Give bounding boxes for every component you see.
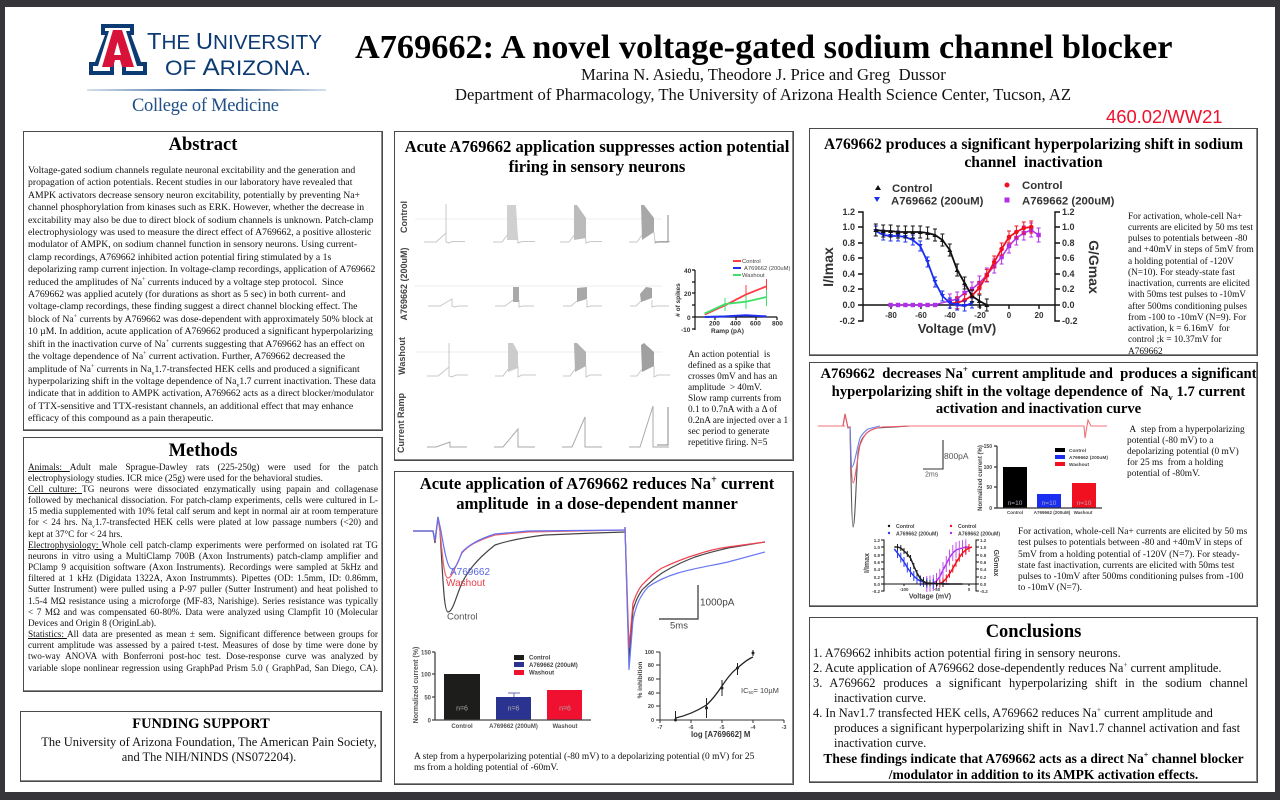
abstract text: hyperpolarizing shift in the voltage dependence of Nav1.7 current inactivation. These data (28, 376, 376, 389)
chart: Nav1.7 activation and inactivation curves: I/Imax (864, 553, 871, 573)
funding text: and The NIH/NINDS (NS072204). (122, 750, 296, 764)
methods text: kept at 37°C for < 24 hrs. (28, 530, 122, 540)
caption: action potential definition (688, 350, 788, 448)
caption: inactivation protocol: and +40mV in steps of 5mV from (1128, 245, 1254, 255)
heading: dose-dependent reduction: amplitude in a dose-dependent manner (456, 494, 738, 513)
chart: Nav1.7 activation and inactivation curves: 1.0 (980, 545, 987, 550)
conclusions list: produces a significant hyperpolarizing shift in Nav1.7 channel activation and fast (834, 720, 1240, 734)
heading: action potential firing (404, 137, 790, 176)
chart: normalized current bars: A769662 (200uM) (489, 724, 538, 730)
chart: I/Imax and G/Gmax vs voltage: 0.4 (1062, 269, 1075, 279)
chart: Nav1.7 activation and inactivation curves: A769662 (200uM) (958, 532, 1000, 538)
chart: Nav1.7 activation and inactivation curves: -50 (934, 587, 941, 592)
chart: dose-response curve: 50 (748, 690, 754, 695)
chart: Nav1.7 normalized current bars: 100 (984, 465, 992, 471)
chart: normalized current bars: A769662 (200uM) (529, 663, 578, 669)
chart: Nav1.7 activation and inactivation curves: -0.2 (872, 589, 880, 594)
chart: number of spikes vs ramp: Control (742, 259, 761, 265)
caption: inactivation protocol: (N=10). For steady-state fast (1128, 268, 1235, 278)
caption: action potential definition: defined as a spike that (688, 361, 771, 371)
chart: sodium current traces: A769662 (450, 567, 490, 578)
conclusions list: inactivation curve. (834, 690, 926, 704)
caption: inactivation protocol: from -100 to -10mV (N=9). For (1128, 313, 1246, 323)
panel: funding support (20, 711, 382, 782)
caption: Nav1.7 voltage step: A step from a hyperpolarizing (1129, 424, 1245, 434)
methods text: followed by mechanical dissociation. For patch-clamp experiments, cells were cultured in L- (28, 496, 378, 506)
methods text: Electrophysiology: Whole cell patch-clamp experiments were performed on isolated rat TG (28, 541, 378, 551)
abstract text: depolarizing ramp current injection. In voltage-clamp recordings, application of A769662 (28, 264, 375, 275)
chart: dose-response curve: -7 (658, 725, 662, 731)
panel: dose-dependent current reduction (394, 471, 794, 785)
methods text: 15 media supplemented with 10% fetal calf serum and kept in normal air at room temperature (28, 507, 378, 517)
caption: Nav1.7 voltage step: for 25 ms from a holding (1127, 458, 1223, 468)
abstract text: Voltage-gated sodium channels regulate neuronal excitability and the generation and (28, 165, 355, 176)
chart: I/Imax and G/Gmax vs voltage: -80 (885, 311, 897, 320)
caption: action potential definition: 0.1 to 0.7nA with a Δ of (688, 405, 777, 415)
chart: Nav1.7 normalized current bars: Washout (1074, 510, 1093, 515)
chart: dose-response curve: 0 (651, 718, 654, 724)
heading: Nav1.7 shift: hyperpolarizing shift in the voltage dependence of Nav 1.7 current (832, 384, 1245, 401)
caption: action potential definition: An action potential is (688, 350, 770, 360)
chart: number of spikes vs ramp: 400 (730, 320, 741, 328)
chart: normalized current bars: 0 (428, 718, 432, 724)
caption: inactivation protocol: activation, k = 6.16mV for (1128, 324, 1230, 334)
chart: Nav1.7 activation and inactivation curves: Voltage (mV) (909, 594, 951, 600)
caption: Nav1.7 voltage step: depolarizing potential (0 mV) (1127, 446, 1239, 456)
chart: normalized current bars: Washout (552, 724, 578, 730)
caption: inactivation protocol: with 50ms test pulses to -10mV (1128, 290, 1246, 300)
chart: dose-response curve: -6 (689, 725, 693, 731)
chart: Nav1.7 normalized current bars: Washout (1069, 462, 1089, 468)
chart: normalized current bars: Control (529, 656, 551, 662)
chart: Nav1.7 activation and inactivation curves: G/Gmax (992, 550, 999, 577)
chart: I/Imax and G/Gmax vs voltage: 0.6 (842, 253, 855, 263)
methods text: Sutter Instrument) were pulled using a P-97 puller (Sutter Instrument) and heat polished to (28, 585, 378, 595)
heading: dose-dependent reduction (420, 474, 774, 513)
conclusions list: 2. Acute application of A769662 dose-dependently reduces Na+ current amplitude. (813, 659, 1222, 674)
chart: Nav1.7 activation and inactivation curves: 1.2 (980, 538, 987, 543)
chart: I/Imax and G/Gmax vs voltage: -40 (944, 311, 956, 320)
methods text: neurons in vitro using a MultiClamp 700B (Axon Instruments) patch-clamp amplifier and (28, 552, 378, 562)
caption: Nav1.7 activation protocol (1018, 527, 1247, 593)
logo: University of Arizona College of Medicine (87, 24, 326, 116)
abstract text: efficacy of this compound as a pain therapeutic. (28, 413, 213, 424)
methods text (28, 462, 378, 674)
chart: Nav1.7 normalized current bars (978, 444, 1108, 515)
chart: dose-response curve: -3 (782, 725, 786, 731)
chart: number of spikes vs ramp: 0 (687, 315, 691, 322)
chart: Nav1.7 activation and inactivation curves: -100 (899, 587, 909, 592)
chart: normalized current bars: n=6 (508, 706, 520, 712)
abstract text: indicate that in addition to AMPK activation, A769662 acts as a direct blocker/modulator (28, 388, 374, 399)
chart: Nav1.7 normalized current bars: 0 (989, 506, 992, 512)
heading: inactivation shift (824, 136, 1243, 170)
caption: action potential definition: sec period to generate (688, 427, 769, 437)
caption: voltage step protocol: A step from a hyperpolarizing potential (-80 mV) to a depolarizing potential (0 mV) for 25 (414, 752, 754, 762)
chart: Nav1.7 normalized current bars: n=10 (1077, 500, 1092, 507)
abstract text: electrophysiology was used to measure the direct effect of A769662, a positive allosteric (28, 227, 371, 238)
conclusions list: 3. A769662 produces a significant hyperpolarizing shift in the sodium channel (813, 676, 1248, 690)
chart: I/Imax and G/Gmax vs voltage: Voltage (mV) (918, 321, 996, 336)
heading: action potential firing: firing in sensory neurons (509, 157, 685, 176)
caption: Nav1.7 voltage step (1127, 424, 1245, 478)
abstract text: the voltage dependence of Na+ current activation. Further, A769662 decreased the (28, 351, 345, 362)
chart: sodium current traces (413, 517, 765, 670)
heading: funding support: FUNDING SUPPORT (132, 716, 270, 732)
methods text: Cell culture: TG neurons were dissociated enzymatically using papain and collagenase (28, 485, 378, 495)
chart: dose-response curve: 80 (648, 663, 654, 669)
abstract text: shift in the inactivation curve of Na+ currents suggesting that A769662 has an effect on (28, 338, 365, 350)
chart: dose-response curve: -5 (720, 725, 724, 731)
caption: inactivation protocol: a holding potential of -120V (1128, 256, 1234, 266)
caption: Nav1.7 activation protocol: 5mV from a holding potential of -120V (N=7). For steady- (1018, 550, 1240, 560)
key finding: These findings indicate that A769662 acts as a direct Na+ channel blocker (823, 750, 1244, 766)
title: A769662: A novel voltage-gated sodium channel blocker (355, 28, 1172, 66)
abstract text: 10 µM. In addition, acute application of A769662 produced a significant hyperpolarizing (28, 326, 373, 337)
chart: I/Imax and G/Gmax vs voltage: 0.6 (1062, 253, 1075, 263)
chart: I/Imax and G/Gmax vs voltage: G/Gmax (1086, 240, 1102, 294)
chart: I/Imax and G/Gmax vs voltage: 0.8 (1062, 238, 1075, 248)
chart: I/Imax and G/Gmax vs voltage: 0.0 (1062, 300, 1075, 310)
chart: number of spikes vs ramp: # of spikes (675, 283, 682, 317)
abstract text: modulator of AMPK, on sodium channel function in sensory neurons. Using current- (28, 239, 357, 250)
chart: Nav1.7 normalized current bars: Control (1007, 510, 1023, 515)
chart: normalized current bars: 150 (421, 650, 432, 656)
abstract text: channel phosphorylation from kinases such as ERK. However, whether the decrease in (28, 202, 364, 213)
chart: number of spikes vs ramp: -10 (681, 327, 691, 334)
heading: Nav1.7 shift: activation and inactivation curve (936, 401, 1141, 417)
chart: dose-response curve: 40 (648, 691, 654, 697)
chart: Nav1.7 activation and inactivation curves: A769662 (200uM) (896, 532, 938, 538)
chart: Nav1.7 activation and inactivation curves: 0.4 (874, 567, 880, 572)
chart: Nav1.7 normalized current bars: n=10 (1008, 500, 1023, 507)
chart: normalized current bars: n=6 (456, 706, 468, 712)
chart: Nav1.7 current traces: 2ms (925, 472, 939, 478)
chart: Nav1.7 activation and inactivation curves: 0 (968, 587, 971, 592)
methods text: 1.5-4 MΩ resistance using a microforge (MF-83, Narishige). Series resistance was typically (28, 597, 378, 607)
abstract text: AMPK activators decrease sensory neuron excitability, potentially by preventing Na+ (28, 190, 360, 201)
abstract text: clamp recordings, A769662 inhibited action potential firing stimulated by a 1s (28, 252, 331, 263)
row label: current ramp: Current Ramp (396, 392, 406, 453)
chart: I/Imax and G/Gmax vs voltage: Control (892, 183, 932, 195)
chart: number of spikes vs ramp (675, 259, 790, 335)
logo: University of Arizona College of Medicine: OF ARIZONA. (165, 54, 311, 81)
caption: inactivation protocol (1128, 212, 1254, 356)
funding text (41, 735, 377, 764)
chart: number of spikes vs ramp: 20 (684, 291, 692, 298)
caption: inactivation protocol: control ;k = 10.37mV for (1128, 335, 1222, 345)
caption: action potential definition: repetitive firing. N=5 (688, 438, 767, 448)
chart: I/Imax and G/Gmax vs voltage: 1.0 (842, 222, 855, 232)
chart: Nav1.7 normalized current bars: 150 (984, 444, 992, 450)
key finding (823, 750, 1244, 782)
caption: inactivation protocol: inactivation, currents are elicited (1128, 279, 1250, 289)
chart: dose-response curve: % inhibition (637, 662, 644, 698)
chart: Nav1.7 activation and inactivation curves: 0.0 (874, 582, 880, 587)
chart: I/Imax and G/Gmax vs voltage: -60 (915, 311, 927, 320)
abstract text: excitability may also be due to direct block of sodium channels is unknown. Patch-clamp (28, 215, 373, 226)
chart: I/Imax and G/Gmax vs voltage: 0.2 (842, 284, 855, 294)
chart: I/Imax and G/Gmax vs voltage (820, 180, 1115, 336)
abstract text: block of Na+ currents by A769662 was dose-dependent with approximately 50% block at (28, 314, 373, 325)
chart: I/Imax and G/Gmax vs voltage: 20 (1035, 311, 1044, 320)
affiliation: Department of Pharmacology, The University of Arizona Health Science Center, Tucson, AZ (455, 85, 1071, 104)
methods text: filtered at 1 kHz (Digidata 1322A, Axon Instrummts). Pipettes (OD: 1.5mm, ID: 0.86mm, (28, 574, 378, 584)
heading: Nav1.7 shift (820, 364, 1257, 417)
chart: Nav1.7 normalized current bars: n=10 (1042, 500, 1057, 507)
chart: dose-response curve (637, 650, 786, 739)
caption: Nav1.7 activation protocol: state fast inactivation, currents are elicited with 50ms test (1018, 561, 1234, 571)
row label: A769662: A769662 (200uM) (399, 247, 409, 321)
chart: sodium current traces: 1000pA (700, 598, 735, 608)
chart: I/Imax and G/Gmax vs voltage: -20 (974, 311, 986, 320)
chart: normalized current bars: Control (451, 724, 473, 730)
methods text: < 7 MΩ and was compensated 60-80%. Data were analyzed using Clampfit 10 (Molecular (28, 608, 378, 618)
abstract text: reduced the amplitudes of Na+ currents induced by a voltage step protocol. Since (28, 276, 343, 288)
chart: Nav1.7 normalized current bars: 50 (986, 485, 992, 491)
caption: Nav1.7 activation protocol: to -10mV (N=7). (1018, 583, 1082, 593)
panel: sodium channel inactivation shift (809, 128, 1258, 356)
chart: I/Imax and G/Gmax vs voltage: 0.0 (842, 300, 855, 310)
chart: Nav1.7 activation and inactivation curves: 1.2 (874, 538, 880, 543)
chart: dose-response curve: 100 (645, 650, 654, 656)
row label: control: Control (399, 201, 409, 233)
panel: methods (23, 437, 383, 692)
chart: number of spikes vs ramp: Washout (742, 273, 765, 279)
methods text: Animals: Adult male Sprague-Dawley rats (225-250g) were used for the patch (28, 462, 378, 472)
chart: Nav1.7 activation and inactivation curves: 1.0 (874, 545, 880, 550)
chart: I/Imax and G/Gmax vs voltage: -0.2 (1062, 316, 1078, 326)
caption: action potential definition: amplitude > 40mV. (688, 383, 762, 393)
poster number: 460.02/WW21 (1106, 106, 1223, 127)
methods text: current amplitude was assessed by a paired t-test. Measures of dose by time were done by (28, 641, 378, 651)
abstract text (28, 165, 376, 424)
methods text: for < 24 hrs. Nav1.7-transfected HEK cells were plated at low passage numbers (<20) and (28, 518, 378, 530)
chart: Nav1.7 activation and inactivation curves: 0.6 (980, 560, 987, 565)
conclusions list (813, 646, 1248, 750)
chart: Nav1.7 activation and inactivation curves: 0.2 (980, 575, 987, 580)
chart: sodium current traces: Control (447, 612, 478, 622)
chart: sodium current traces: Washout (446, 578, 485, 589)
heading: inactivation shift: A769662 produces a significant hyperpolarizing shift in sodium (824, 136, 1243, 152)
chart: I/Imax and G/Gmax vs voltage: 0.2 (1062, 284, 1075, 294)
panel: action potential firing (394, 131, 794, 461)
chart: normalized current bars (413, 647, 591, 730)
chart: Nav1.7 activation and inactivation curves: Control (958, 524, 977, 530)
heading: abstract: Abstract (169, 135, 237, 155)
heading: methods: Methods (169, 441, 237, 461)
caption: Nav1.7 voltage step: potential (-80 mV) to a (1127, 436, 1213, 446)
methods text: Devices and Origin 8 (OriginLab). (28, 619, 156, 629)
conclusions list: 1. A769662 inhibits action potential firing in sensory neurons. (813, 646, 1121, 660)
key finding: /modulator in addition to its AMPK activation effects. (889, 766, 1198, 782)
heading: dose-dependent reduction: Acute application of A769662 reduces Na+ current (420, 474, 774, 493)
chart: Nav1.7 activation and inactivation curves: 0.2 (874, 575, 880, 580)
chart: I/Imax and G/Gmax vs voltage: 0.4 (842, 269, 855, 279)
chart: dose-response curve: log [A769662] M (691, 730, 750, 739)
chart: number of spikes vs ramp: A769662 (200uM) (744, 266, 790, 272)
logo: University of Arizona College of Medicine: College of Medicine (132, 96, 279, 116)
conclusions list: 4. In Nav1.7 transfected HEK cells, A769662 reduces Na+ current amplitude and (813, 704, 1213, 720)
caption: inactivation protocol: currents are elicited by 50 ms test (1128, 223, 1253, 233)
chart: current-clamp traces (396, 201, 670, 453)
chart: I/Imax and G/Gmax vs voltage: -0.2 (839, 316, 855, 326)
heading: inactivation shift: channel inactivation (964, 154, 1103, 170)
chart: number of spikes vs ramp: Ramp (pA) (711, 328, 744, 335)
methods text: Statistics: All data are presented as mean ± sem. Significant difference between groups for (28, 630, 378, 640)
caption: voltage step protocol: ms from a holding potential of -60mV. (414, 763, 558, 773)
abstract text: voltage-clamp recordings, these finding suggest a direct channel blocking effect. The (28, 301, 357, 312)
chart: I/Imax and G/Gmax vs voltage: Control (1022, 180, 1062, 192)
caption: inactivation protocol: after 500ms conditioning pulses (1128, 302, 1247, 312)
chart: dose-response curve: -4 (751, 725, 756, 731)
heading: action potential firing: Acute A769662 application suppresses action potential (405, 137, 789, 156)
chart: dose-response curve: = 10µM (754, 686, 779, 695)
chart: I/Imax and G/Gmax vs voltage: I/Imax (820, 247, 836, 287)
chart: dose-response curve: IC (741, 686, 748, 695)
chart: Nav1.7 current traces: 800pA (944, 451, 969, 461)
methods text: PClamp 9 acquisition software (Axon Instruments). Recordings were sampled at 5kHz and (28, 563, 378, 573)
chart: Nav1.7 normalized current bars: A769662 (200uM) (1034, 510, 1071, 515)
caption: action potential definition: Slow ramp currents from (688, 394, 781, 404)
conclusions list: inactivation curve. (834, 736, 926, 750)
methods text: electrophysiology studies. ICR mice (25g) were used for the behavioral studies. (28, 474, 323, 484)
caption: action potential definition: crosses 0mV and has an (688, 372, 777, 382)
chart: dose-response curve: 20 (648, 704, 654, 710)
chart: Nav1.7 activation and inactivation curves: 0.8 (980, 553, 987, 558)
chart: number of spikes vs ramp: 800 (772, 320, 783, 328)
abstract text: of TTX-sensitive and TTX-resistant channels, an additional effect that may enhance (28, 401, 353, 412)
chart: I/Imax and G/Gmax vs voltage: 1.2 (1062, 207, 1075, 217)
panel: abstract (23, 131, 383, 431)
chart: number of spikes vs ramp: 40 (684, 268, 692, 275)
authors: Marina N. Asiedu, Theodore J. Price and Greg Dussor (581, 65, 946, 84)
caption: Nav1.7 activation protocol: pulses to -10mV after 500ms conditioning pulses from -100 (1018, 572, 1243, 582)
logo: University of Arizona College of Medicine: THE UNIVERSITY (147, 28, 322, 54)
chart: Nav1.7 activation and inactivation curves: 0.0 (980, 582, 987, 587)
abstract text: A769662 was applied acutely (for durations as short as 5 sec) in both current- and (28, 289, 345, 300)
chart: number of spikes vs ramp: 600 (750, 320, 761, 328)
chart: normalized current bars: Washout (529, 670, 554, 676)
chart: I/Imax and G/Gmax vs voltage: 1.0 (1062, 222, 1075, 232)
chart: Nav1.7 activation and inactivation curves: 0.4 (980, 567, 987, 572)
chart: dose-response curve: 60 (648, 677, 654, 683)
chart: number of spikes vs ramp: 200 (709, 320, 720, 328)
caption: inactivation protocol: For activation, whole-cell Na+ (1128, 212, 1242, 222)
chart: Nav1.7 activation and inactivation curves: Control (896, 524, 915, 530)
caption: Nav1.7 activation protocol: test pulses to potentials between -80 and +40mV in steps of (1018, 538, 1242, 548)
chart: normalized current bars: 100 (421, 672, 432, 678)
caption: inactivation protocol: pulses to potentials between -80 (1128, 234, 1247, 244)
chart: I/Imax and G/Gmax vs voltage: A769662 (200uM) (1022, 196, 1115, 208)
chart: I/Imax and G/Gmax vs voltage: 1.2 (842, 207, 855, 217)
panel: Nav1.7 current amplitude (809, 362, 1258, 607)
chart: Nav1.7 normalized current bars: Control (1069, 448, 1086, 454)
chart: normalized current bars: Normalized current (%) (413, 647, 420, 723)
methods text: two-way ANOVA with Bonferroni post-hoc test. Dose-response curve was analyzed by (28, 652, 378, 662)
chart: Nav1.7 normalized current bars: Normalized current (%) (978, 445, 984, 511)
caption: Nav1.7 activation protocol: For activation, whole-cell Na+ currents are elicited by 50 ms (1018, 527, 1247, 537)
caption: Nav1.7 voltage step: potential of -80mV. (1127, 468, 1200, 478)
chart: Nav1.7 activation and inactivation curves: 0.8 (874, 553, 880, 558)
heading: conclusions: Conclusions (986, 622, 1081, 642)
chart: normalized current bars: n=6 (559, 706, 571, 712)
chart: normalized current bars: 50 (424, 696, 432, 702)
heading: Nav1.7 shift: A769662 decreases Na+ current amplitude and produces a significant (820, 364, 1257, 382)
methods text: variable slope nonlinear regression using GraphPad Prism 5.0 ( GraphPad, San Diego, CA). (28, 664, 378, 674)
funding text: The University of Arizona Foundation, The American Pain Society, (41, 735, 377, 749)
chart: Nav1.7 activation and inactivation curves (864, 524, 1000, 600)
chart: I/Imax and G/Gmax vs voltage: 0.8 (842, 238, 855, 248)
caption: voltage step protocol (414, 752, 754, 773)
chart: Nav1.7 current traces (818, 414, 1107, 527)
chart: Nav1.7 normalized current bars: A769662 (200uM) (1069, 455, 1108, 461)
abstract text: propagation of action potentials. Recent studies in our laboratory have revealed that (28, 177, 352, 188)
row label: washout: Washout (397, 337, 407, 375)
chart: I/Imax and G/Gmax vs voltage: 0 (1007, 311, 1012, 320)
chart: I/Imax and G/Gmax vs voltage: A769662 (200uM) (891, 196, 984, 208)
chart: sodium current traces: 5ms (670, 620, 688, 632)
abstract text: amplitude of Na+ currents in Nav1.7-transfected HEK cells and produced a significant (28, 363, 360, 376)
panel: conclusions (809, 617, 1258, 783)
caption: action potential definition: 0.2nA are injected over a 1 (688, 416, 788, 426)
chart: Nav1.7 activation and inactivation curves: 0.6 (874, 560, 880, 565)
chart: Nav1.7 activation and inactivation curves: -0.2 (980, 589, 988, 594)
